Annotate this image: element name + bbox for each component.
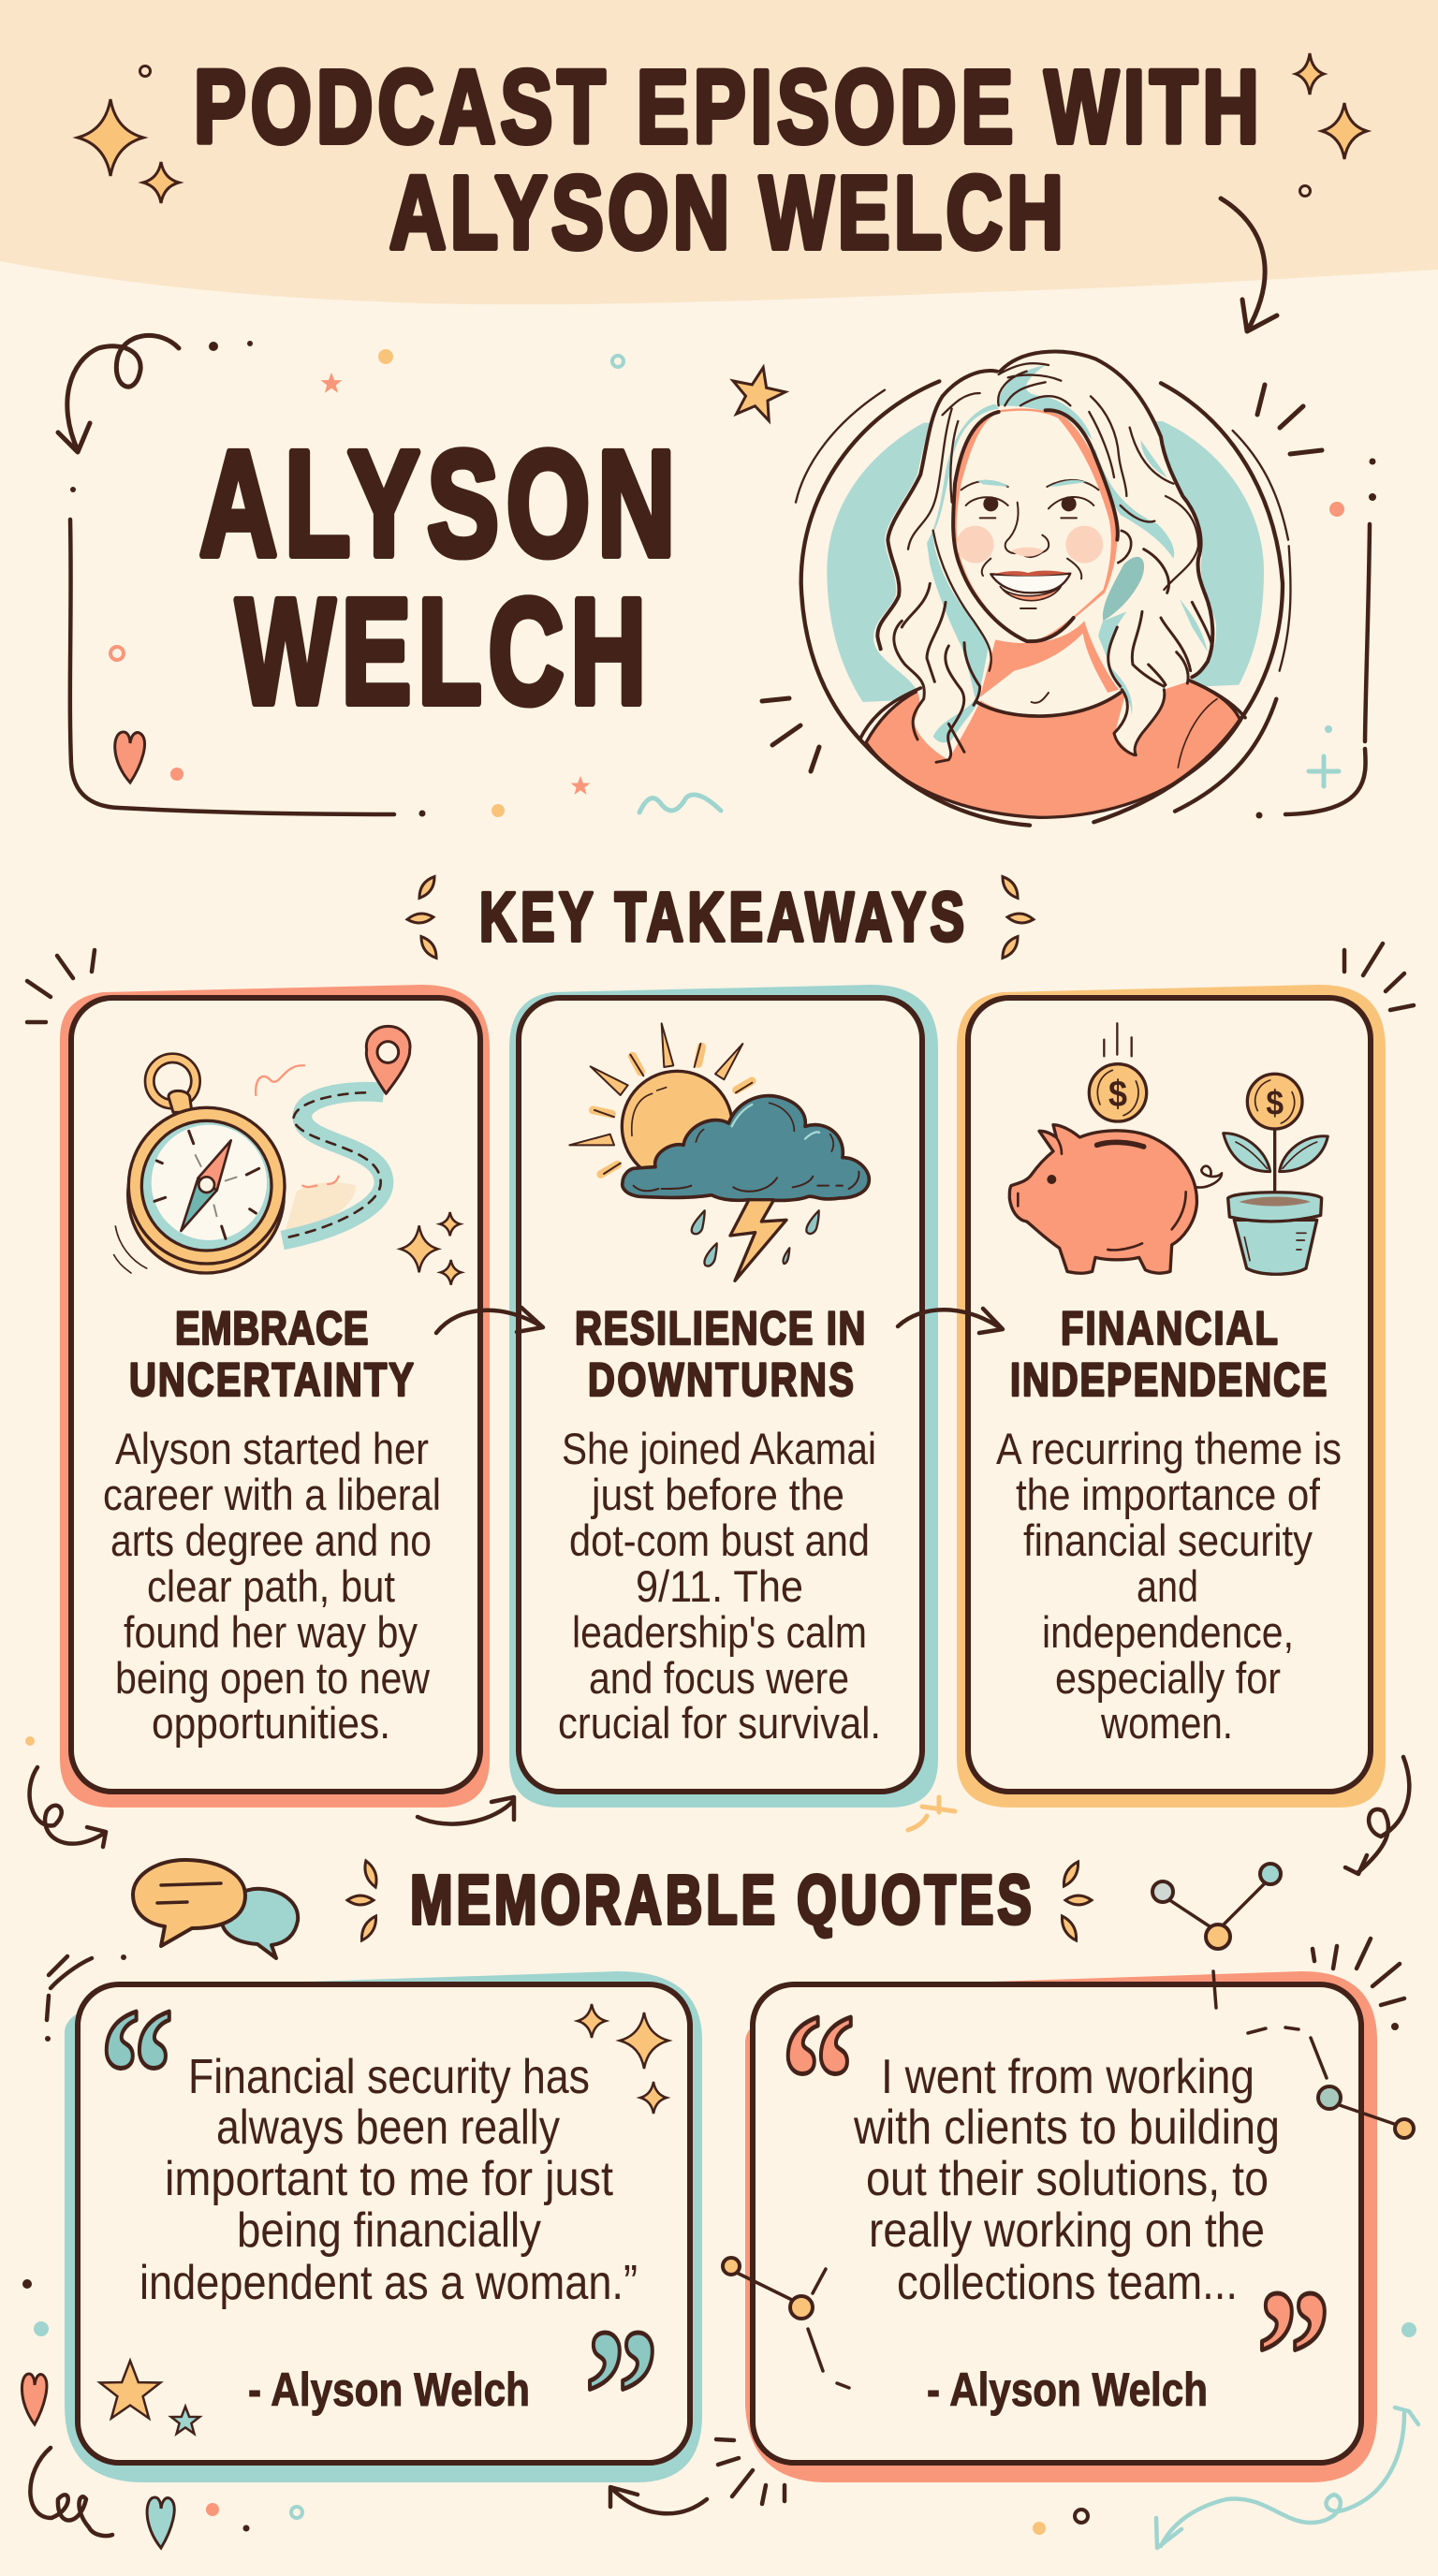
icon: piggy bank and coin plant: $ [1108, 1074, 1127, 1115]
card 3 body: independence, [1042, 1607, 1294, 1657]
opening quote mark: “ [781, 1976, 856, 2183]
card 1 body: career with a liberal [103, 1470, 441, 1519]
title [194, 50, 1259, 271]
card 1 body: Alyson started her [115, 1424, 429, 1473]
quote text [139, 2050, 638, 2310]
card 2 body: She joined Akamai [562, 1424, 876, 1473]
card 1: embrace uncertainty [60, 985, 490, 1808]
return arrow [610, 2487, 707, 2513]
title: PODCAST EPISODE WITH [194, 50, 1259, 165]
card 3 body [996, 1424, 1342, 1748]
arrows between cards [418, 1308, 1003, 1824]
card 1 heading: EMBRACE [175, 1302, 368, 1354]
key takeaways heading: KEY TAKEAWAYS [479, 878, 964, 956]
icon: compass and road [114, 1026, 462, 1285]
card 3 heading: FINANCIAL [1061, 1302, 1278, 1354]
card 3 body: the importance of [1016, 1470, 1321, 1519]
quote text: important to me for just [165, 2152, 613, 2206]
header band [0, 0, 1438, 304]
card 2 body: crucial for survival. [558, 1698, 881, 1748]
hair mass [873, 351, 1216, 760]
header sparkles [78, 53, 1367, 203]
quote text: always been really [216, 2100, 560, 2155]
quote section ticks [47, 1939, 1404, 2504]
card 1 heading: UNCERTAINTY [129, 1354, 414, 1406]
card 2 heading [575, 1302, 865, 1406]
network doodle top [1152, 1864, 1414, 2138]
name heading [199, 419, 675, 736]
hair strokes [877, 352, 1212, 762]
teal hair streaks [927, 365, 1208, 742]
corner ticks [27, 944, 1414, 1022]
card 2 body: just before the [590, 1470, 844, 1519]
eyes and features [961, 480, 1098, 703]
name frame [70, 520, 1370, 814]
card 1 body: opportunities. [152, 1698, 390, 1748]
closing quote mark: ” [1256, 2252, 1331, 2459]
bottom confetti [22, 1954, 1416, 2548]
card 3 body: A recurring theme is [996, 1424, 1342, 1473]
card 2 body: and focus were [589, 1653, 849, 1703]
card 3 body: financial security [1023, 1515, 1313, 1565]
icon: speech bubbles [133, 1860, 298, 1958]
teal arrow bottom right [1156, 2408, 1418, 2548]
attribution: - Alyson Welch [927, 2364, 1208, 2416]
card 3 body: women. [1100, 1698, 1233, 1748]
portrait [796, 351, 1291, 826]
key takeaways heading [407, 874, 1034, 960]
quote text: really working on the [869, 2203, 1265, 2258]
quote text: I went from working [881, 2050, 1255, 2104]
card 2: resilience in downturns [509, 985, 938, 1808]
face [953, 408, 1117, 643]
card 1 body [103, 1424, 441, 1748]
card 1 body: found her way by [124, 1607, 418, 1657]
neckline [976, 693, 1121, 716]
title: ALYSON WELCH [389, 155, 1064, 271]
bottom left curl [30, 2448, 112, 2536]
swirl arrow [58, 335, 179, 452]
quote text: being financially [237, 2203, 541, 2258]
card 2 heading: RESILIENCE IN [575, 1302, 865, 1354]
shirt [866, 681, 1240, 817]
quote text: Financial security has [188, 2050, 590, 2104]
curl arrow right [1345, 1757, 1409, 1874]
attribution: - Alyson Welch [248, 2364, 530, 2416]
closing quote mark: ” [584, 2291, 659, 2498]
cheeks [957, 526, 994, 564]
quote text: with clients to building [853, 2100, 1280, 2155]
card 1 body: arts degree and no [110, 1515, 432, 1565]
opening quote mark: “ [99, 1970, 174, 2177]
memorable quotes heading: MEMORABLE QUOTES [410, 1861, 1032, 1939]
card 1 body: being open to new [115, 1653, 431, 1703]
quote card 2 [745, 1971, 1377, 2482]
card 2 body [558, 1424, 881, 1748]
card 2 heading: DOWNTURNS [588, 1354, 854, 1406]
ear and neck [978, 621, 1121, 715]
petals [347, 1859, 1092, 1942]
card 1 heading [129, 1302, 414, 1406]
network doodle bottom [723, 2258, 849, 2388]
card 3 body: especially for [1055, 1653, 1281, 1703]
name confetti [70, 341, 1376, 818]
quote text: collections team... [897, 2256, 1238, 2310]
petals [407, 874, 1034, 960]
quote text [853, 2050, 1280, 2310]
orange doodle [908, 1797, 955, 1830]
name heading: ALYSON [199, 419, 675, 587]
sparkles and stars [100, 2004, 668, 2434]
icon: piggy bank and coin plant: $ [1266, 1083, 1284, 1122]
card 3 heading [1010, 1302, 1327, 1406]
icon: piggy bank and coin plant [1009, 1023, 1328, 1274]
arrow: header to portrait [1221, 198, 1277, 331]
card 3 body: and [1137, 1561, 1198, 1611]
card 2 body: dot-com bust and [569, 1515, 870, 1565]
icon: sun and storm cloud [569, 1023, 869, 1281]
card 3: financial independence [957, 985, 1386, 1808]
outer rings [801, 381, 1283, 826]
smile [1000, 587, 1061, 601]
card 1 body: clear path, but [147, 1561, 395, 1611]
teal background [827, 421, 1264, 702]
card 2 body: leadership's calm [572, 1607, 867, 1657]
quote text: out their solutions, to [866, 2152, 1269, 2206]
quote text: independent as a woman.” [139, 2256, 638, 2310]
card 3 heading: INDEPENDENCE [1010, 1354, 1327, 1406]
card 2 body: 9/11. The [636, 1561, 803, 1611]
portrait spark ticks [762, 385, 1322, 771]
name heading: WELCH [236, 568, 646, 736]
quote card 1 [65, 1970, 702, 2498]
curl arrow left [30, 1767, 106, 1847]
